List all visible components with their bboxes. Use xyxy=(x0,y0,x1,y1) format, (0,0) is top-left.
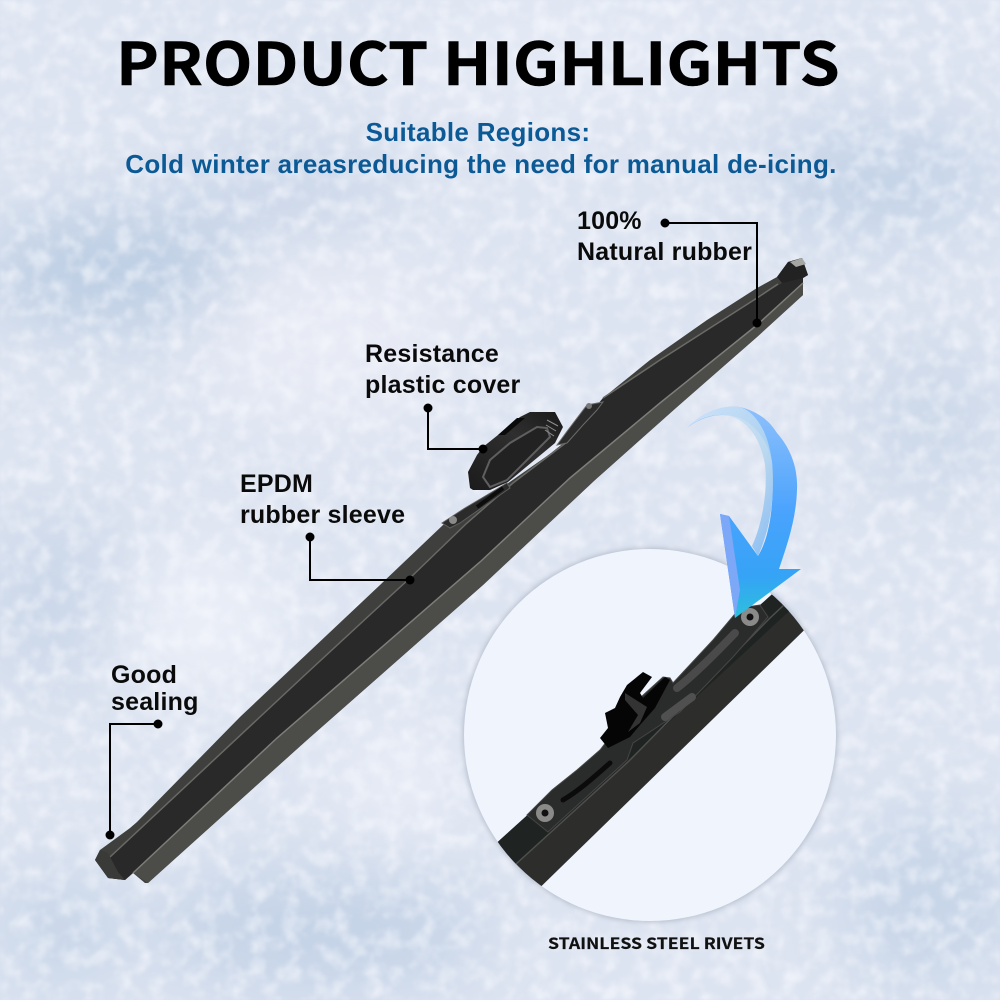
label: resistance plastic cover: Resistance xyxy=(365,340,499,368)
label: EPDM rubber sleeve xyxy=(240,470,405,529)
inset rivet lower xyxy=(536,804,554,822)
inset rivet upper xyxy=(741,608,759,626)
leader: good sealing xyxy=(106,720,162,838)
label: good sealing xyxy=(111,661,199,716)
inset circle: rivet detail xyxy=(463,548,837,922)
leader: EPDM rubber sleeve xyxy=(306,534,414,584)
title: PRODUCT HIGHLIGHTS xyxy=(116,17,840,102)
subtitle: suitable regions: Suitable Regions: xyxy=(366,117,590,147)
label: 100% natural rubber xyxy=(577,207,752,266)
label: good sealing: sealing xyxy=(111,688,199,716)
leader: resistance plastic cover xyxy=(424,404,486,452)
label: 100% natural rubber: 100% xyxy=(577,207,642,235)
label: EPDM rubber sleeve: rubber sleeve xyxy=(240,501,405,529)
label: resistance plastic cover: plastic cover xyxy=(365,371,520,399)
label: good sealing: Good xyxy=(111,661,177,689)
plastic cover xyxy=(468,412,563,490)
blade body xyxy=(95,258,808,883)
leader: 100% natural rubber xyxy=(662,220,760,326)
label: 100% natural rubber: Natural rubber xyxy=(577,238,752,266)
inset clip and plate xyxy=(527,605,768,832)
curved blue arrow xyxy=(688,407,801,618)
label: EPDM rubber sleeve: EPDM xyxy=(240,470,313,498)
wiper blade xyxy=(95,218,840,925)
caption: stainless steel rivets: STAINLESS STEEL RIVETS xyxy=(548,932,765,954)
clip bracket plates xyxy=(442,402,603,528)
subtitle: suitable regions: Cold winter areasreducing the need for manual de-icing. xyxy=(125,149,837,179)
label: resistance plastic cover xyxy=(365,340,520,399)
subtitle: suitable regions xyxy=(125,117,837,179)
